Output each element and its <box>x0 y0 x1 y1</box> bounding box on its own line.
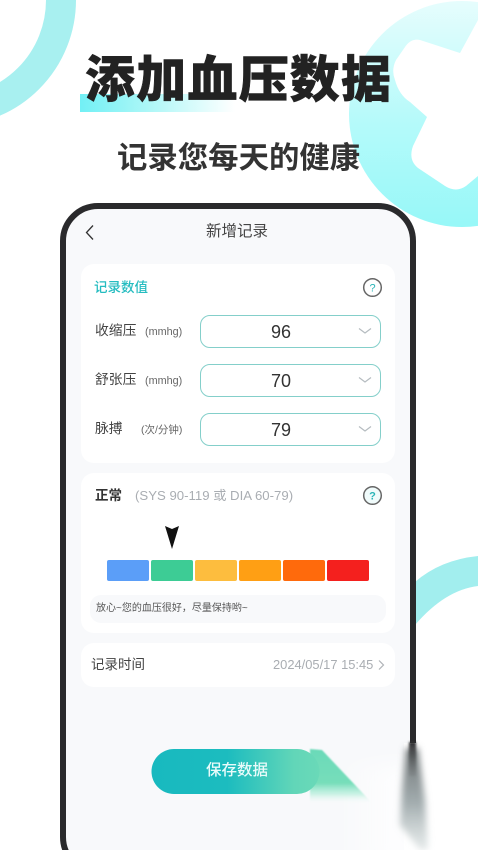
decoration: right arc <box>415 556 478 625</box>
status label: 正常 <box>95 488 122 503</box>
icon: help <box>362 278 382 297</box>
panel: status <box>81 473 395 633</box>
decoration: top-left arc <box>0 0 61 111</box>
record time label: 记录时间 <box>91 657 145 672</box>
save button <box>152 748 368 800</box>
input: diastolic <box>200 364 381 397</box>
subtitle: 记录您每天的健康 <box>117 141 360 175</box>
record time value: 2024/05/17 15:45 <box>273 657 373 672</box>
scale bar: blue <box>107 560 149 581</box>
tip text: 放心~您的血压很好，尽量保持哟~ <box>96 603 248 614</box>
icon: help: ? <box>369 282 376 294</box>
panel heading: record values: 记录数值 <box>94 280 148 295</box>
icon: back chevron <box>86 225 94 240</box>
title highlight bar <box>80 94 235 112</box>
scale bar: yellow <box>195 560 237 581</box>
scale bar: red <box>327 560 369 581</box>
input: pulse <box>200 413 381 446</box>
status range: (SYS 90-119 或 DIA 60-79) <box>135 488 293 503</box>
label: pulse: 脉搏 <box>95 421 123 436</box>
input: pulse: 79 <box>271 420 291 440</box>
panel: record time <box>81 643 395 687</box>
icon: help <box>362 486 382 505</box>
icon: help: ? <box>369 490 376 502</box>
unit: systolic: (mmhg) <box>145 326 182 338</box>
scale bar: green <box>151 560 193 581</box>
phone frame <box>60 203 416 850</box>
watermark fade area <box>398 740 430 850</box>
panel: record values <box>81 264 395 463</box>
decoration: top-right cross blob <box>349 1 478 227</box>
title: 添加血压数据 <box>85 52 392 108</box>
icon: dropdown chevrons <box>358 328 372 432</box>
scale bar: orange <box>239 560 281 581</box>
label: diastolic: 舒张压 <box>95 372 136 387</box>
input: systolic <box>200 315 381 348</box>
phone header title: 新增记录 <box>206 223 268 240</box>
icon: chevron right <box>378 660 384 670</box>
label: systolic: 收缩压 <box>95 323 136 338</box>
input: diastolic: 70 <box>271 371 291 391</box>
unit: pulse: (次/分钟) <box>141 424 182 436</box>
icon: pointer arrow <box>165 526 179 549</box>
tip box <box>90 595 386 623</box>
save button label: 保存数据 <box>206 762 268 779</box>
input: systolic: 96 <box>271 322 291 342</box>
unit: diastolic: (mmhg) <box>145 375 182 387</box>
scale bar: deep orange <box>283 560 325 581</box>
